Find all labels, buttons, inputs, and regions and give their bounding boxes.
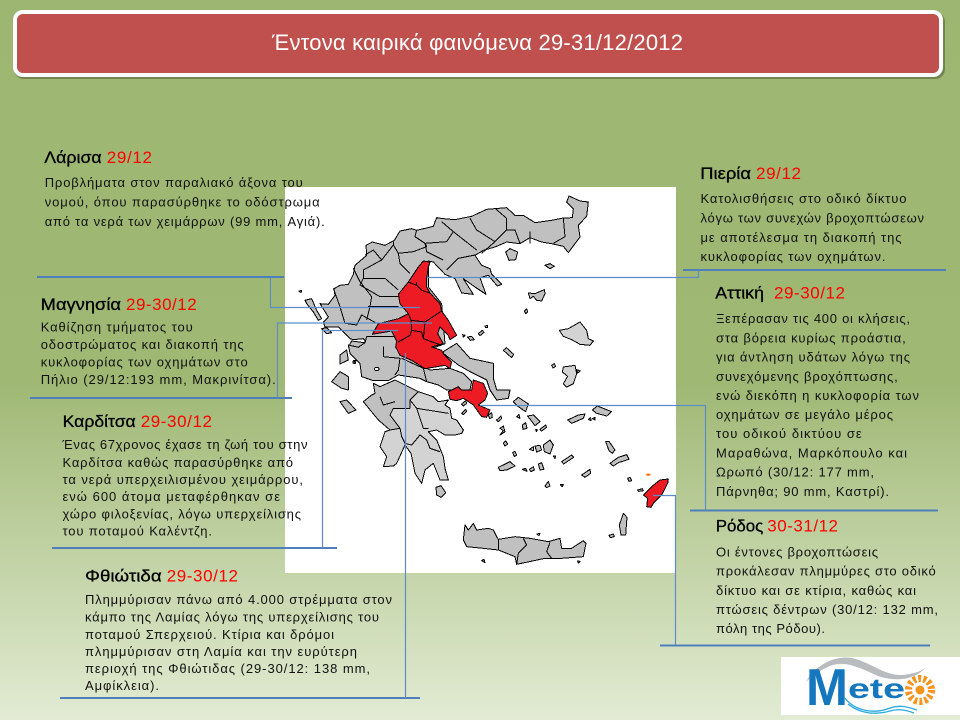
text block: Attica: συνεχόμενης βροχόπτωσης, [716, 369, 898, 384]
text block: Karditsa: τα νερά υπερχειλισμένου χειμάρρου, [62, 472, 303, 487]
logo: Meteo [781, 657, 960, 717]
text block: Fthiotida: Αμφίκλεια). [85, 678, 159, 693]
leader line: Attica [480, 406, 938, 510]
map: central Greece, Evia and Peloponnese [332, 337, 510, 483]
map panel: Greece with affected regions in red [285, 187, 676, 573]
leader line: Karditsa [52, 330, 398, 548]
logo: waves [844, 697, 917, 713]
leader line: Larisa [37, 277, 420, 308]
text block: Karditsa: Καρδίτσα [63, 412, 136, 431]
text block: Fthiotida: 29-30/12 [167, 566, 238, 586]
map: western and northern islands [299, 249, 556, 368]
logo: sun [908, 678, 932, 702]
text block: Fthiotida: Φθιώτιδα [85, 566, 162, 586]
text block: Attica: οχημάτων σε μεγάλο μέρος [716, 407, 893, 422]
map: affected regions Pieria, Larisa, Magnesia, Karditsa, Fthiotida [372, 261, 457, 369]
map: Lesvos and Chios [559, 322, 593, 387]
map: Symi islet [646, 473, 651, 476]
map: Evia island [443, 343, 510, 400]
text block: Magnesia: Μαγνησία [41, 295, 121, 314]
text block: Fthiotida: περιοχή της Φθιώτιδας (29-30/12: 138 mm, [85, 661, 370, 676]
text block: Magnesia: Καθίζηση τμήματος του [41, 320, 193, 334]
text block: Pieria: με αποτέλεσμα τη διακοπή της [700, 230, 902, 245]
text block: Attica: Μαραθώνα, Μαρκόπουλο και [716, 446, 907, 460]
logo: grey swoosh [806, 657, 925, 682]
map: Peloponnese south-east [380, 392, 463, 483]
text block: Pieria [700, 164, 924, 264]
text block: Magnesia: κυκλοφορίας των οχημάτων στο [41, 354, 248, 370]
text block: Fthiotida [85, 566, 392, 693]
text block: Rhodes: Ρόδος [716, 516, 763, 536]
map: Peloponnese north-west [363, 380, 418, 430]
leader line: Rhodes [653, 496, 930, 646]
text block: Attica [715, 284, 919, 499]
map: Rhodes in red [643, 479, 668, 507]
text block: Rhodes: Οι έντονες βροχοπτώσεις [716, 544, 878, 560]
text block: Fthiotida: Πλημμύρισαν πάνω από 4.000 στρέμματα στον [85, 592, 392, 607]
map: northern Greece [299, 196, 593, 387]
text block: Karditsa: του ποταμού Καλέντζη. [62, 524, 212, 538]
map: Attica in red [448, 380, 490, 417]
text block: Rhodes [716, 516, 938, 636]
text block: Attica: για άντληση υδάτων λόγω της [716, 350, 910, 364]
text block: Larisa: από τα νερά των χειμάρρων (99 mm, Αγιά). [45, 214, 325, 229]
text block: Larisa [44, 148, 325, 229]
map: Ionian islands [332, 350, 356, 413]
text block: Attica: του οδικού δικτύου σε [716, 426, 862, 441]
text block: Karditsa: Καρδίτσα καθώς παρασύρθηκε από [62, 455, 293, 470]
text block: Pieria: Πιερία [700, 164, 751, 183]
map: Crete [463, 523, 586, 564]
text block: Rhodes: πόλη της Ρόδου). [716, 621, 825, 636]
text block: Rhodes: πτώσεις δέντρων (30/12: 132 mm, [716, 602, 938, 617]
text block: Karditsa [62, 412, 308, 538]
logo: wordmark: ete [848, 673, 905, 704]
text block: Pieria: κυκλοφορίας των οχημάτων. [700, 249, 886, 264]
text block: Karditsa: Ένας 67χρονος έχασε τη ζωή του στην [62, 437, 308, 452]
text block: Rhodes: προκάλεσαν πλημμύρες στο οδικό [716, 564, 936, 578]
text block: Rhodes: 30-31/12 [767, 516, 838, 536]
text block: Attica: Ξεπέρασαν τις 400 οι κλήσεις, [716, 311, 910, 326]
text block: Attica: Ωρωπό (30/12: 177 mm, [716, 464, 874, 480]
text block: Karditsa: χώρο φιλοξενίας, λόγω υπερχείλισης [62, 506, 301, 522]
text block: Karditsa: ενώ 600 άτομα μεταφέρθηκαν σε [62, 489, 280, 504]
leader line: Pieria [427, 270, 946, 278]
map: prefecture borders of the north [333, 208, 565, 325]
leader line: Fthiotida [60, 353, 420, 698]
text block: Pieria: 29/12 [756, 164, 801, 183]
leader line: Magnesia [30, 323, 432, 398]
map: Aegean islands and Kythera [436, 397, 668, 564]
text block: Fthiotida: κάμπο της Λαμίας λόγω της υπερχείλισης του [85, 610, 379, 624]
text block: Attica: ενώ διεκόπη η κυκλοφορία των [716, 388, 919, 403]
text block: Magnesia: Πήλιο (29/12:193 mm, Μακρινίτσα). [41, 372, 276, 387]
text block: Karditsa: 29-30/12 [141, 412, 212, 431]
text block: Rhodes: δίκτυο και σε κτίρια, καθώς και [716, 583, 916, 598]
logo: wordmark: M [806, 659, 848, 717]
title banner: Έντονα καιρικά φαινόμενα 29-31/12/2012 [271, 30, 683, 55]
text block: Larisa: Προβλήματα στον παραλιακό άξονα του [45, 175, 303, 190]
text block: Magnesia: 29-30/12 [126, 295, 197, 314]
text block: Magnesia [41, 295, 276, 387]
text block: Magnesia: οδοστρώματος και διακοπή της [41, 337, 244, 352]
text block: Larisa: νομού, όπου παρασύρθηκε το οδόστρωμα [45, 194, 320, 210]
title banner [14, 12, 945, 79]
text block: Larisa: 29/12 [107, 148, 152, 167]
text block: Attica: Αττική [715, 284, 764, 302]
logo: wordmark [806, 659, 905, 717]
text block: Pieria: Κατολισθήσεις στο οδικό δίκτυο [700, 191, 906, 206]
text block: Larisa: Λάρισα [44, 148, 102, 167]
text block: Fthiotida: πλημμύρισαν στη Λαμία και την ευρύτερη [85, 644, 357, 659]
text block: Attica: στα βόρεια κυρίως προάστια, [716, 330, 906, 346]
text block: Attica: 29-30/12 [774, 284, 845, 302]
text block: Fthiotida: ποταμού Σπερχειού. Κτίρια και δρόμοι [85, 627, 334, 642]
text block: Attica: Πάρνηθα; 90 mm, Καστρί). [716, 484, 889, 499]
text block: Pieria: λόγω των συνεχών βροχοπτώσεων [700, 210, 924, 226]
